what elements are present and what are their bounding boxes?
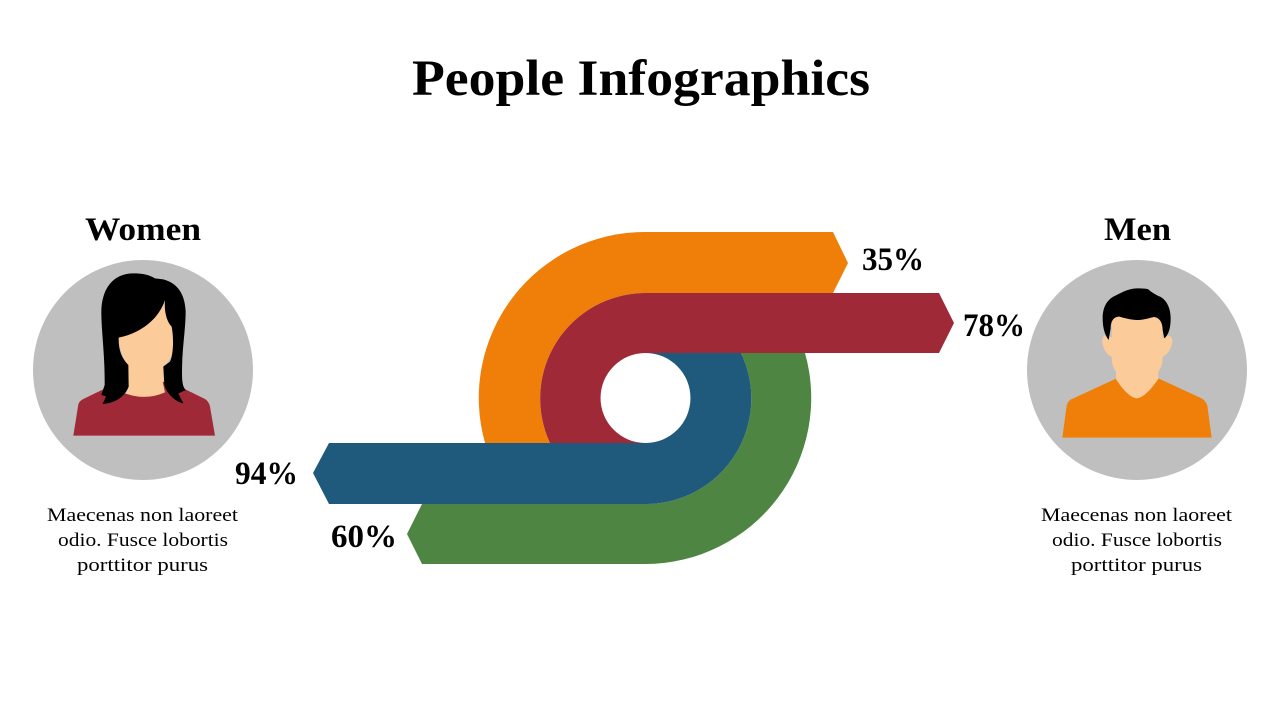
text block: women: [47, 505, 239, 576]
text block: men: porttitor purus: [1071, 555, 1202, 576]
text block: women: Maecenas non laoreet: [47, 505, 239, 526]
text block: women: porttitor purus: [77, 555, 208, 576]
icon: woman avatar: [33, 260, 253, 480]
label: 94%: 94%: [235, 456, 298, 492]
text block: men: [1041, 505, 1233, 576]
heading: men: Men: [1104, 212, 1171, 248]
text block: men: Maecenas non laoreet: [1041, 505, 1233, 526]
heading: women: Women: [85, 212, 201, 248]
icon: man avatar: [1027, 260, 1247, 480]
label: 35%: 35%: [862, 242, 924, 278]
arrow: red 78%: [540, 293, 954, 443]
chart: interlocking arrows: [235, 232, 1025, 564]
arrow: orange 35%: [479, 232, 848, 443]
panel: women: [33, 212, 253, 576]
label: 78%: 78%: [963, 308, 1025, 344]
text block: men: odio. Fusce lobortis: [1052, 530, 1222, 551]
arrow: green 60%: [407, 353, 811, 564]
panel: men: [1027, 212, 1247, 576]
text block: women: odio. Fusce lobortis: [58, 530, 228, 551]
title: People Infographics: [412, 51, 870, 107]
arrow: blue 94%: [313, 353, 751, 504]
label: 60%: 60%: [331, 519, 397, 555]
